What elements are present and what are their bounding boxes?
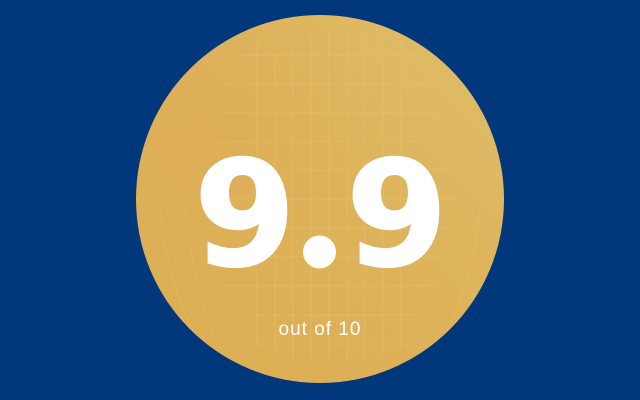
- score 9.9: .: [312, 226, 327, 272]
- score 9.9: [194, 130, 448, 300]
- caption: out of 10: out of 10: [279, 319, 361, 340]
- score 9.9: 9: [194, 130, 296, 300]
- gold circle: [136, 15, 504, 383]
- rating infographic: [136, 15, 504, 383]
- score 9.9: 9: [346, 130, 448, 300]
